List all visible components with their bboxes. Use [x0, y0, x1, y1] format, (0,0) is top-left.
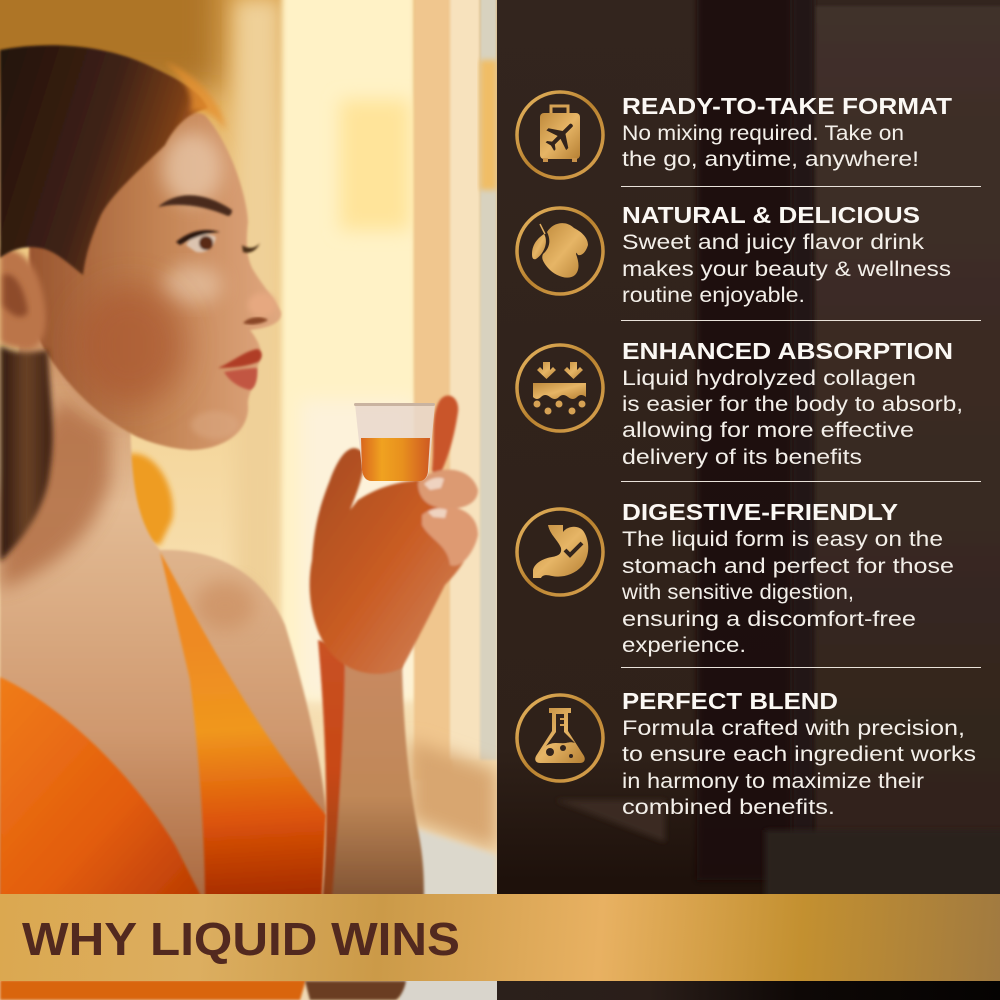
icon: stomach with check — [517, 509, 603, 595]
jaw highlight — [192, 412, 236, 438]
text block: Liquid hydrolyzed collagen — [622, 366, 916, 390]
heading: ENHANCED ABSORPTION — [622, 338, 953, 364]
text block: routine enjoyable. — [622, 283, 805, 307]
text block: No mixing required. Take on — [622, 121, 904, 145]
feature 5: perfect blend — [517, 688, 976, 819]
heading: PERFECT BLEND — [622, 688, 838, 714]
text block: Sweet and juicy flavor drink — [622, 230, 924, 254]
cup — [354, 403, 435, 481]
text block: is easier for the body to absorb, — [622, 392, 963, 416]
hair: top — [0, 45, 208, 275]
icon: flask — [517, 695, 603, 781]
text block: to ensure each ingredient works — [622, 742, 976, 766]
face highlight: cheek — [162, 265, 222, 305]
hand holding cup — [310, 396, 478, 674]
text block: makes your beauty & wellness — [622, 257, 951, 281]
text block: Formula crafted with precision, — [622, 716, 965, 740]
hair: flyaway glow — [165, 62, 226, 130]
eyebrow — [158, 195, 232, 216]
heading: DIGESTIVE-FRIENDLY — [622, 499, 898, 525]
text block: with sensitive digestion, — [621, 580, 854, 604]
text block: in harmony to maximize their — [622, 769, 924, 793]
feature 4: digestive-friendly — [517, 499, 954, 657]
text block: experience. — [622, 633, 746, 657]
text block: delivery of its benefits — [622, 445, 862, 469]
heading: NATURAL & DELICIOUS — [622, 202, 920, 228]
dress — [0, 552, 326, 1000]
text block: stomach and perfect for those — [622, 554, 954, 578]
back hair glow behind neck — [125, 454, 173, 545]
hair: lower section — [0, 345, 53, 562]
photo: woman sipping from a small cup by a window — [0, 0, 497, 1000]
face shade: warm cheek — [75, 285, 185, 405]
text block — [621, 527, 954, 657]
shoulder shade — [195, 580, 255, 630]
text block: the go, anytime, anywhere! — [622, 147, 919, 171]
lips — [218, 349, 262, 390]
text block: allowing for more effective — [622, 418, 914, 442]
banner: why liquid wins — [0, 894, 1000, 981]
feature 3: enhanced absorption — [517, 338, 963, 469]
forearm — [305, 640, 424, 1000]
woman: face — [30, 110, 281, 450]
icon: luggage with plane — [517, 92, 603, 178]
eye — [176, 230, 260, 253]
ear — [0, 249, 46, 349]
text block: ensuring a discomfort-free — [622, 607, 916, 631]
face highlight: forehead — [162, 132, 222, 204]
face highlight: nose — [249, 294, 278, 315]
neck shading — [0, 400, 110, 590]
icon: mango — [517, 208, 603, 294]
heading: READY-TO-TAKE FORMAT — [622, 93, 952, 119]
text block — [622, 121, 919, 171]
panel: dark benefits background — [497, 0, 1000, 1000]
woman: neck and chest — [0, 240, 326, 900]
text block — [622, 230, 951, 307]
feature 2: natural and delicious — [517, 202, 951, 307]
feature 1: ready-to-take format — [517, 92, 952, 178]
text block: combined benefits. — [622, 795, 835, 819]
text block — [622, 366, 963, 469]
nostril — [243, 317, 268, 324]
text block — [622, 716, 976, 819]
window background — [0, 0, 497, 1000]
ear inner shade — [3, 274, 28, 317]
banner title: WHY LIQUID WINS — [22, 913, 460, 965]
text block: The liquid form is easy on the — [622, 527, 943, 551]
icon: absorption arrows and skin — [517, 345, 603, 431]
